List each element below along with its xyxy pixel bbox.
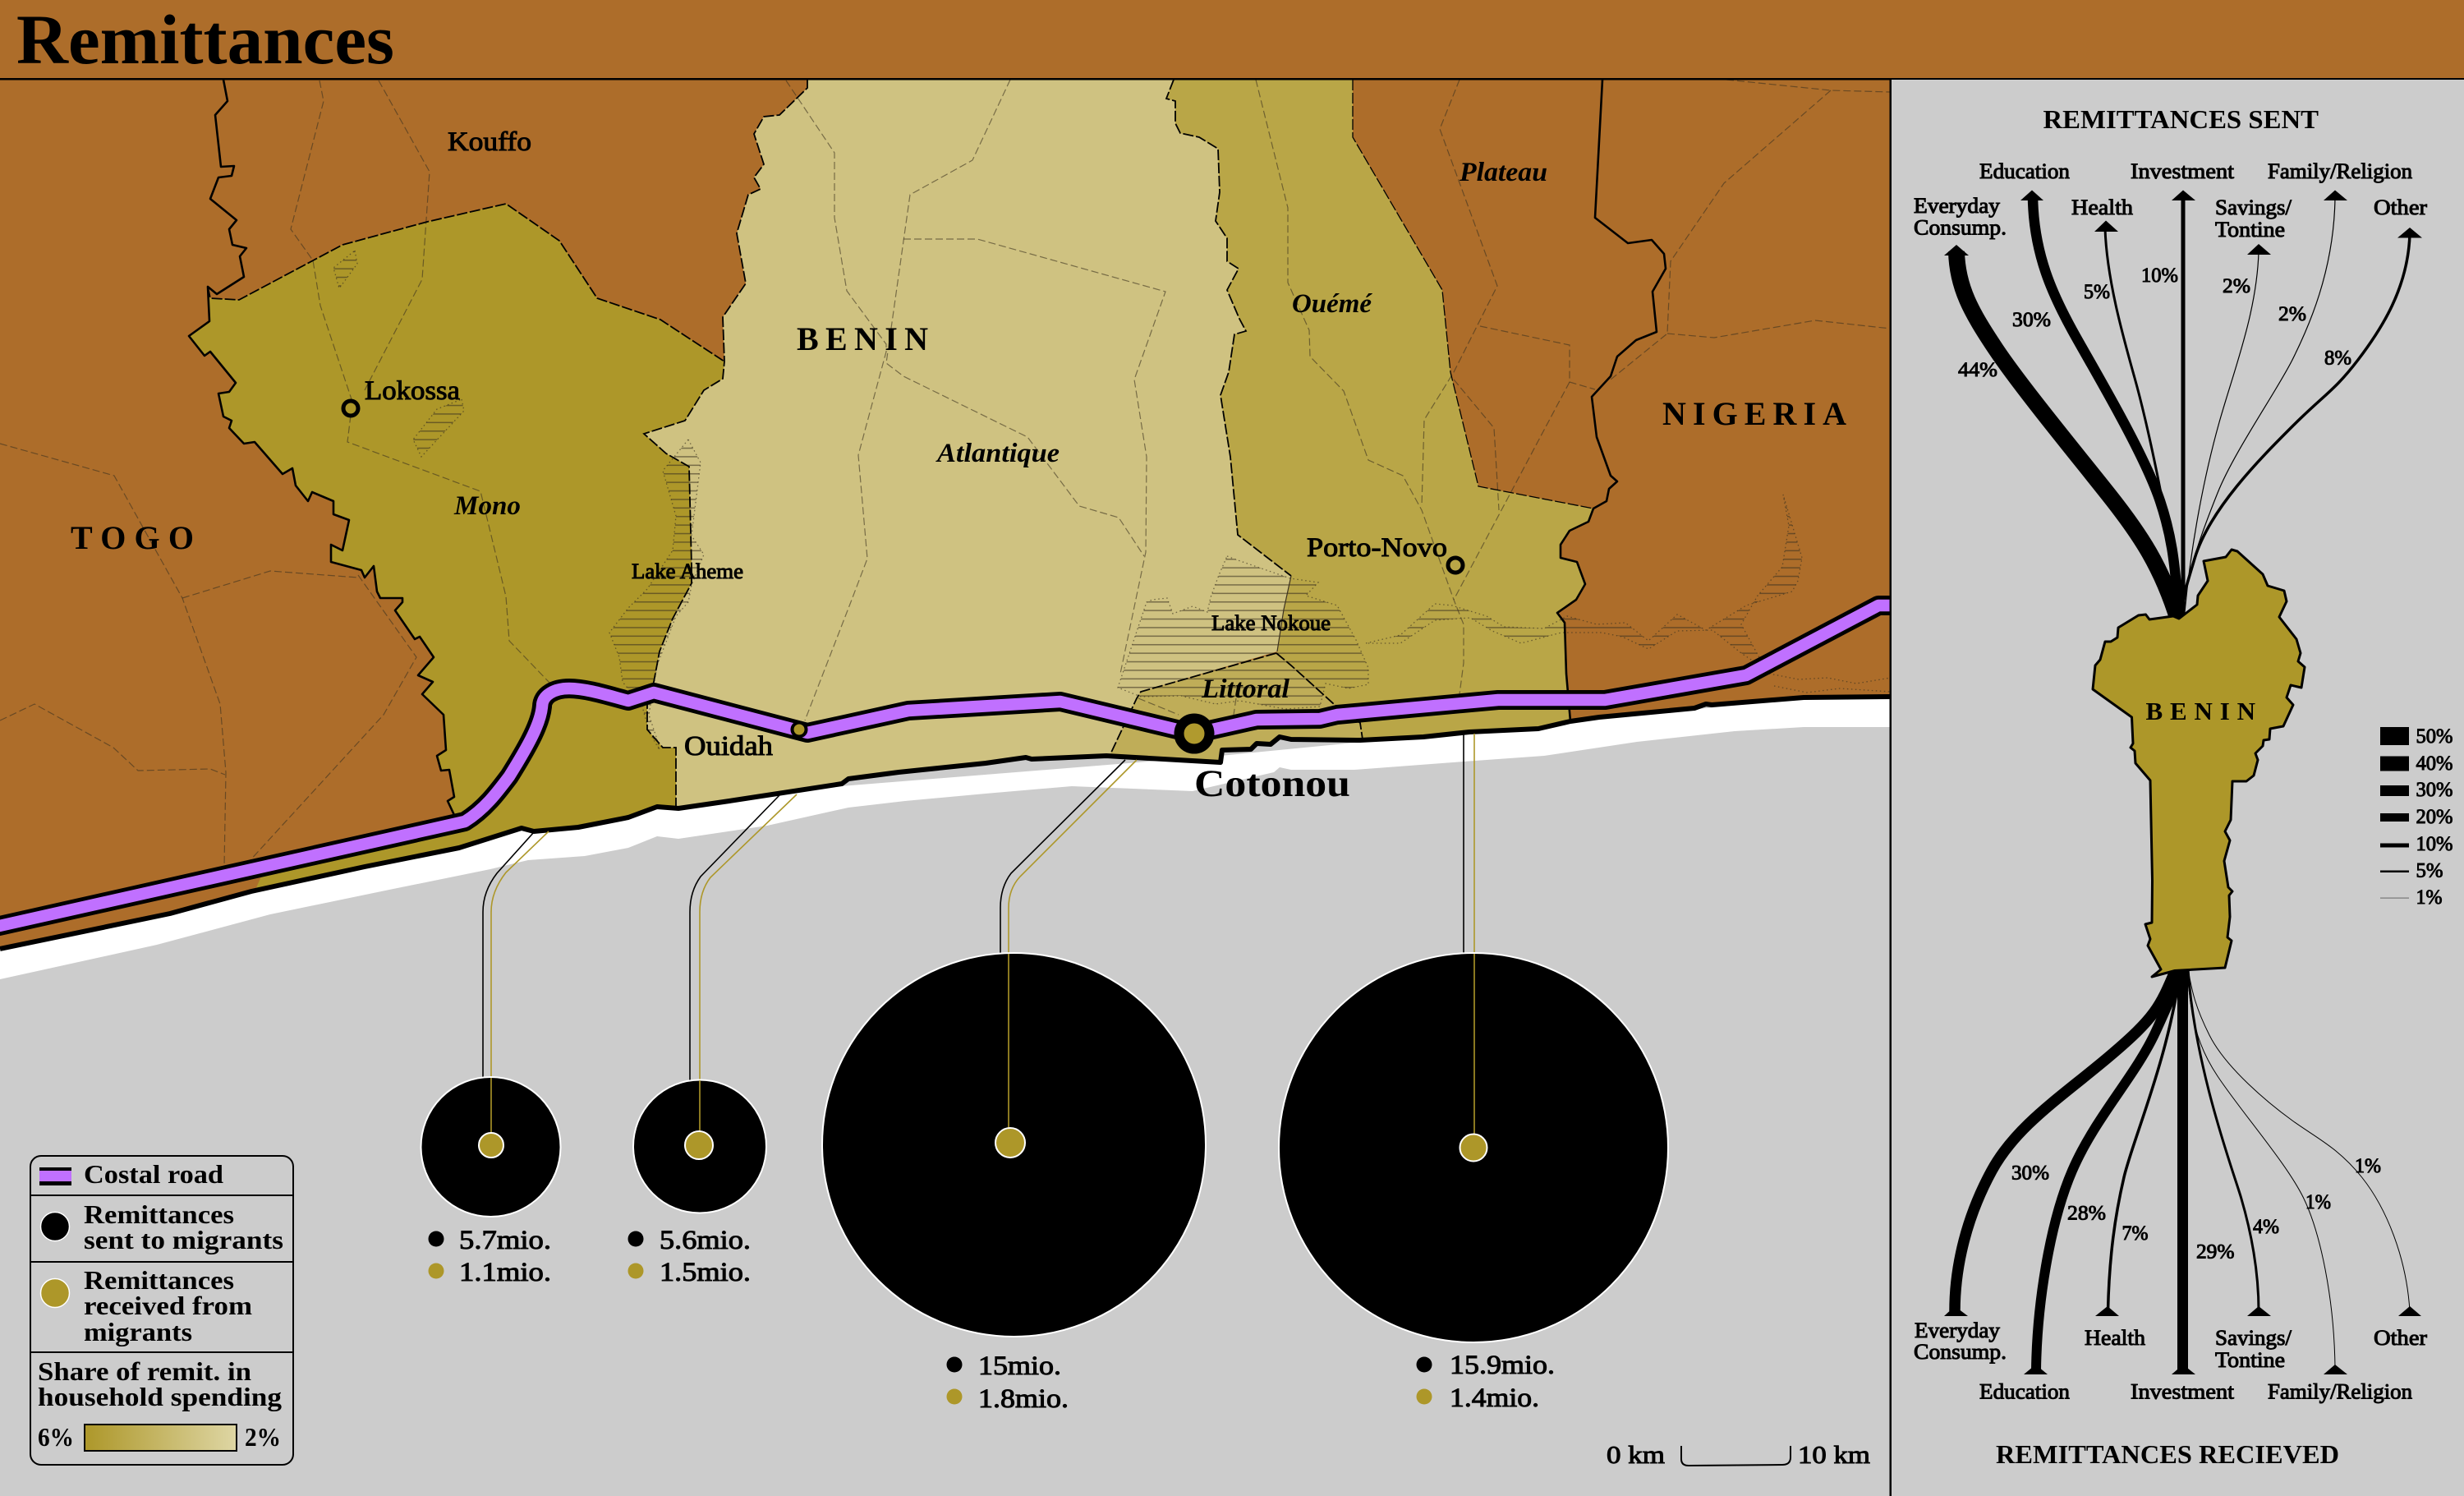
arrow: family and religion received 1%: Family/Religion <box>2268 1380 2412 1403</box>
arrow: health sent 5%: 5% <box>2084 281 2110 303</box>
circle: Ouidah remittances: 1.5mio. <box>660 1258 751 1287</box>
arrow: everyday consumption received 30%: Everyday <box>1915 1319 2000 1342</box>
map labels: Porto-Novo <box>1307 533 1447 563</box>
legend item: share gradient: household spending <box>38 1382 282 1411</box>
title: Remittances <box>16 0 394 79</box>
region: Littoral <box>1110 653 1363 762</box>
map labels: Lokossa <box>365 376 460 406</box>
land: Togo, Kouffo, Plateau, Nigeria <box>0 80 1891 949</box>
circle: Cotonou remittances: 1.8mio. <box>978 1384 1069 1414</box>
arrow: family and religion sent 2%: 2% <box>2278 303 2306 325</box>
map labels: Atlantique <box>935 439 1060 468</box>
circle: Mono remittances: 1.1mio. <box>459 1258 551 1287</box>
legend item: remittances received: received from <box>84 1291 252 1320</box>
region: Atlantique <box>644 80 1291 808</box>
header bar <box>0 0 2464 81</box>
arrow: other sent 8%: Other <box>2374 196 2427 219</box>
arrow: family and religion sent 2%: Family/Religion <box>2268 159 2412 183</box>
circle: Mono remittances <box>421 1077 560 1287</box>
legend item: share gradient: 6% <box>38 1422 74 1452</box>
legend item: share gradient: Share of remit. in <box>38 1356 251 1386</box>
arrow: everyday consumption sent 44%: 44% <box>1958 359 1997 381</box>
legend item: remittances sent: sent to migrants <box>84 1225 283 1254</box>
arrow: health received 7%: 7% <box>2122 1222 2149 1245</box>
flow thickness legend: 40% <box>2416 753 2453 775</box>
internal district boundaries <box>0 80 1891 867</box>
arrow: other received 1% <box>2188 969 2427 1350</box>
scale bar: 10 km <box>1798 1440 1870 1469</box>
scale bar: 0 km <box>1607 1440 1665 1469</box>
scale bar <box>1607 1440 1870 1469</box>
map labels: Mono <box>453 491 521 521</box>
arrow: health received 7% <box>2085 968 2181 1350</box>
lake: Lake Nokoue <box>1118 556 1368 709</box>
map labels: Cotonou <box>1194 762 1350 805</box>
legend <box>30 1156 293 1465</box>
arrow: investment sent 10% <box>2131 159 2235 618</box>
arrow: savings received 4%: 4% <box>2253 1216 2279 1238</box>
white coastal band <box>0 690 1891 979</box>
map labels: Ouémé <box>1292 289 1372 319</box>
city marker: Ouidah <box>792 723 807 736</box>
Benin label: BENIN <box>2145 697 2255 725</box>
arrow: health sent 5% <box>2071 196 2181 612</box>
arrow: family and religion sent 2% <box>2183 159 2412 612</box>
legend item: remittances received <box>41 1265 252 1346</box>
arrow: savings sent 2%: 2% <box>2223 275 2250 297</box>
arrow: other received 1%: Other <box>2374 1326 2427 1350</box>
arrow: everyday consumption received 30%: Consump. <box>1914 1340 2007 1364</box>
legend item: remittances received: Remittances <box>84 1265 234 1295</box>
legend item: coastal road: Costal road <box>84 1159 223 1189</box>
city marker: Lokossa <box>343 401 358 416</box>
flow thickness legend <box>2380 725 2453 909</box>
circle: Mono remittances: 5.7mio. <box>459 1226 551 1255</box>
panel: flows <box>1889 80 2464 1496</box>
circle: Porto-Novo remittances <box>1279 953 1668 1413</box>
flow thickness legend: 5% <box>2416 859 2443 882</box>
national borders <box>189 80 1666 815</box>
region: Ouémé <box>1166 80 1593 740</box>
arrow: other sent 8% <box>2183 196 2427 612</box>
arrow: savings sent 2% <box>2185 196 2292 612</box>
flow thickness legend: 50% <box>2416 725 2453 748</box>
arrow: health received 7%: Health <box>2085 1326 2145 1350</box>
flow thickness legend: 10% <box>2416 833 2453 855</box>
arrow: savings received 4% <box>2188 969 2292 1372</box>
arrow: other received 1%: 1% <box>2355 1155 2381 1177</box>
map labels: BENIN <box>797 320 928 357</box>
arrow: education received 28% <box>1979 968 2180 1403</box>
arrow: investment received 29%: Investment <box>2131 1380 2235 1403</box>
map panel <box>0 80 1893 1135</box>
lake: Lake Aheme <box>609 440 704 750</box>
heading: remittances sent: REMITTANCES SENT <box>2043 104 2319 134</box>
circle: Ouidah remittances: 5.6mio. <box>660 1226 751 1255</box>
arrow: savings sent 2%: Tontine <box>2215 218 2285 242</box>
coastal road <box>0 605 1893 927</box>
legend item: remittances sent: Remittances <box>84 1199 234 1229</box>
flow thickness legend: 20% <box>2416 806 2453 828</box>
arrow: everyday consumption sent 44%: Everyday <box>1914 194 2000 218</box>
arrow: family and religion received 1% <box>2186 968 2412 1403</box>
legend item: remittances sent <box>41 1199 283 1254</box>
connector lines from cities to circles <box>483 734 1474 1135</box>
legend item: share gradient <box>38 1356 282 1452</box>
arrow: education received 28%: Education <box>1979 1380 2070 1403</box>
arrow: everyday consumption received 30%: 30% <box>2011 1162 2049 1185</box>
map labels: Kouffo <box>448 127 531 157</box>
flow thickness legend: 1% <box>2416 886 2443 909</box>
circle: Cotonou remittances <box>822 953 1206 1414</box>
arrow: investment sent 10%: Investment <box>2131 159 2235 183</box>
map labels: Lake Nokoue <box>1211 611 1331 635</box>
map labels: Ouidah <box>684 731 773 762</box>
arrow: education received 28%: 28% <box>2067 1203 2106 1225</box>
arrow: education sent 30%: Education <box>1979 159 2070 183</box>
arrow: investment sent 10%: 10% <box>2141 265 2178 287</box>
circle: Porto-Novo remittances: 15.9mio. <box>1450 1351 1555 1380</box>
arrow: family and religion received 1%: 1% <box>2305 1191 2331 1213</box>
lake: small hatched ponds in Mono <box>333 251 464 457</box>
circle: Porto-Novo remittances: 1.4mio. <box>1450 1383 1539 1413</box>
city marker: Cotonou <box>1179 718 1209 749</box>
arrow: everyday consumption received 30% <box>1914 968 2177 1364</box>
flow thickness legend: 30% <box>2416 779 2453 801</box>
arrow: education sent 30% <box>1979 159 2180 618</box>
district boundaries of the study area <box>208 80 1593 808</box>
arrow: savings received 4%: Tontine <box>2215 1348 2285 1372</box>
arrow: investment received 29% <box>2131 968 2235 1403</box>
arrow: health sent 5%: Health <box>2071 196 2133 219</box>
arrow: everyday consumption sent 44%: Consump. <box>1914 215 2007 240</box>
legend item: share gradient: 2% <box>245 1422 281 1452</box>
Benin silhouette <box>2093 550 2305 977</box>
region: Mono <box>189 204 724 891</box>
arrow: other sent 8%: 8% <box>2324 347 2351 370</box>
river wetlands east of Nokoue <box>1366 495 1891 693</box>
circle: Ouidah remittances <box>627 1079 766 1287</box>
map labels: Plateau <box>1459 158 1547 187</box>
circle: Cotonou remittances: 15mio. <box>978 1351 1061 1381</box>
city marker: Porto-Novo <box>1448 558 1463 573</box>
map labels: NIGERIA <box>1662 395 1846 432</box>
map labels <box>71 127 1846 805</box>
heading: remittances received: REMITTANCES RECIEVED <box>1996 1439 2339 1469</box>
arrow: everyday consumption sent 44% <box>1914 194 2178 620</box>
map labels: Littoral <box>1201 674 1290 704</box>
arrow: savings sent 2%: Savings/ <box>2215 196 2292 219</box>
arrow: investment received 29%: 29% <box>2196 1241 2234 1264</box>
legend item: remittances received: migrants <box>84 1317 192 1346</box>
arrow: savings received 4%: Savings/ <box>2215 1326 2292 1350</box>
map labels: Lake Aheme <box>632 559 743 583</box>
coastline <box>0 697 1891 949</box>
arrow: education sent 30%: 30% <box>2012 309 2051 331</box>
map labels: TOGO <box>71 519 194 556</box>
